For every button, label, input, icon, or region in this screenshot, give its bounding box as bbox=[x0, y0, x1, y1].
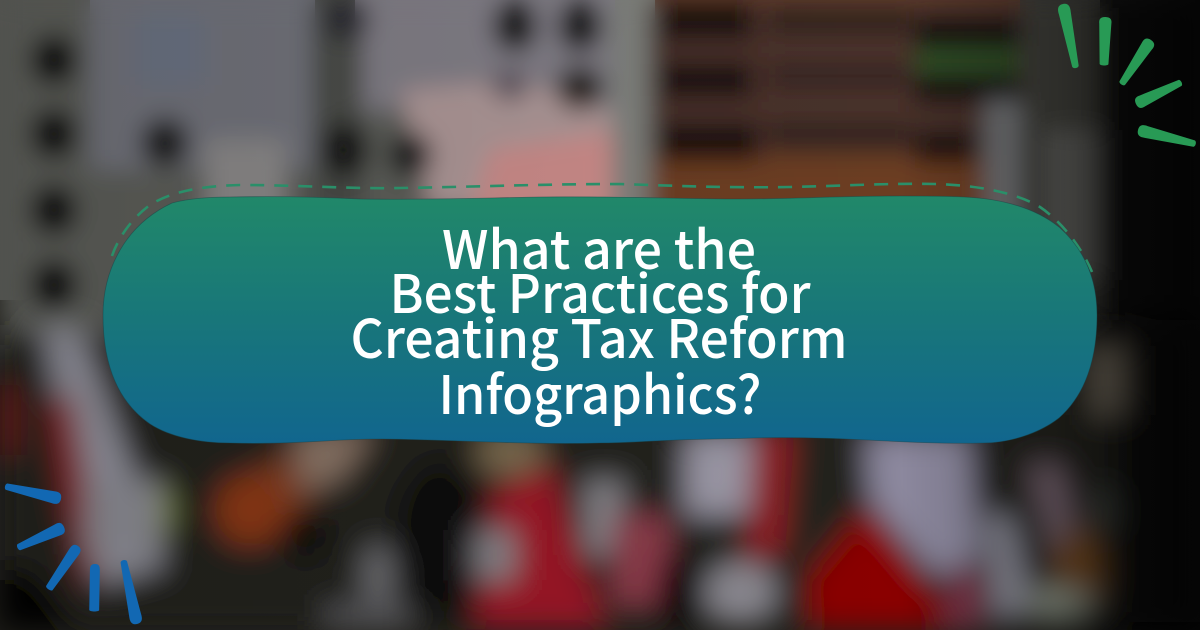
icon: blue burst rays bbox=[4, 480, 143, 625]
icon: green burst rays bbox=[1057, 3, 1197, 150]
title text: Best Practices for bbox=[390, 253, 811, 329]
title panel bbox=[103, 196, 1097, 443]
title text: Creating Tax Reform bbox=[350, 298, 848, 374]
title text: What are the bbox=[442, 209, 756, 285]
title text bbox=[350, 209, 848, 430]
dashed outline arc bbox=[112, 184, 1092, 272]
title text: Infographics? bbox=[438, 354, 762, 430]
